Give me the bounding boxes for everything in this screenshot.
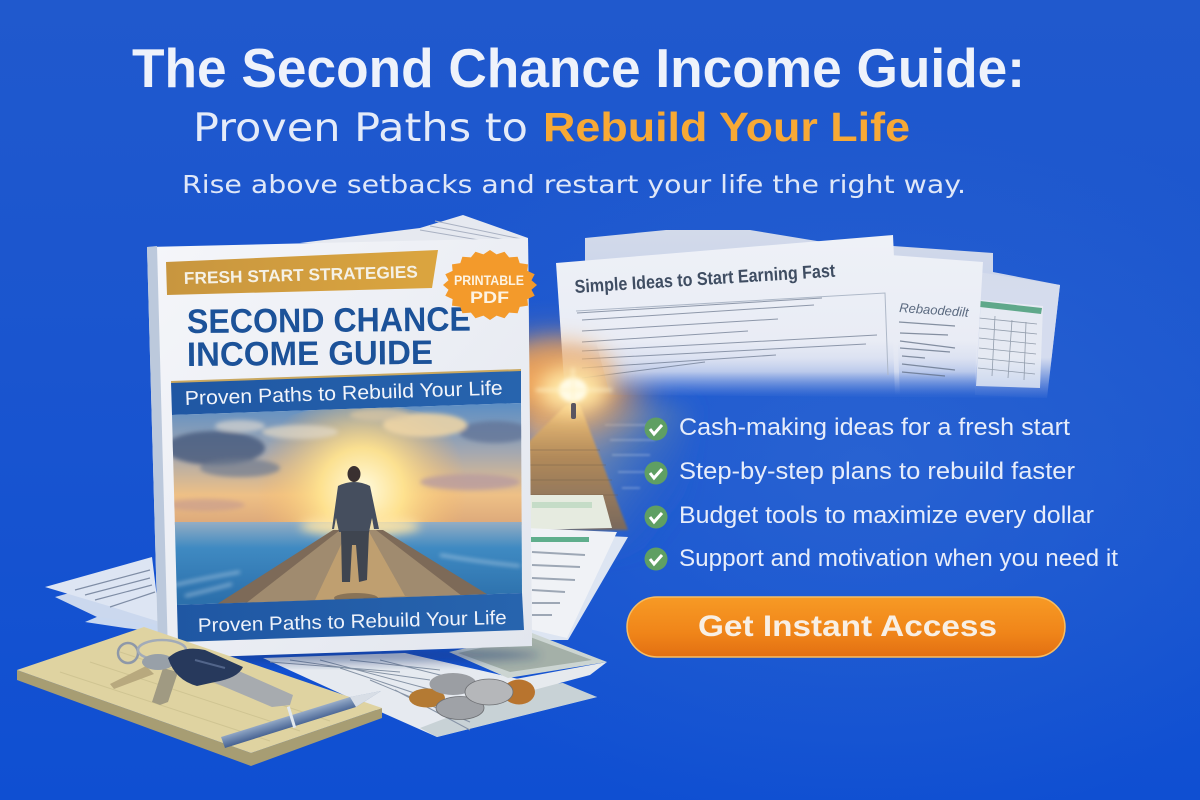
man bbox=[332, 466, 379, 603]
title: The Second Chance Income Guide: bbox=[132, 37, 1025, 99]
badge: printable pdf: PDF bbox=[470, 288, 509, 307]
call to action button: Get Instant Access bbox=[698, 610, 997, 643]
bottom band bbox=[177, 593, 524, 642]
tagline: Rise above setbacks and restart your life the right way. bbox=[182, 170, 966, 199]
book title: INCOME GUIDE bbox=[187, 334, 433, 374]
book title: SECOND CHANCE bbox=[187, 301, 471, 341]
sun glow bbox=[505, 340, 615, 419]
loose papers left bbox=[45, 557, 160, 632]
sheet: budget table bbox=[975, 272, 1060, 398]
worksheets bbox=[556, 230, 1060, 398]
subtitle: Proven Paths to bbox=[193, 106, 528, 151]
back sheets bbox=[585, 230, 1060, 398]
book title bbox=[187, 301, 471, 374]
cover bbox=[147, 238, 532, 658]
shadow bbox=[150, 647, 540, 663]
loose papers right bbox=[525, 495, 628, 640]
book subtitle band: Proven Paths to Rebuild Your Life bbox=[184, 377, 503, 410]
subtitle highlight: Rebuild Your Life bbox=[543, 104, 910, 150]
spine bbox=[147, 246, 168, 655]
keys bbox=[110, 640, 293, 707]
benefit 4: Support and motivation when you need it bbox=[679, 545, 1118, 572]
benefits list bbox=[644, 414, 1118, 572]
badge: printable pdf bbox=[443, 250, 537, 320]
page stack bbox=[300, 215, 532, 640]
banknotes and forms bbox=[263, 633, 607, 737]
benefit 1: Cash-making ideas for a fresh start bbox=[679, 414, 1070, 441]
sheet: rebuild: Rebaodedilt bbox=[899, 300, 970, 320]
benefit 3: Budget tools to maximize every dollar bbox=[679, 502, 1094, 529]
bottom band: Proven Paths to Rebuild Your Life bbox=[198, 607, 507, 637]
banner text: FRESH START STRATEGIES bbox=[184, 262, 418, 288]
book bbox=[147, 215, 540, 663]
pen bbox=[221, 691, 381, 748]
badge: printable pdf: PRINTABLE bbox=[454, 273, 524, 288]
benefit 2: Step-by-step plans to rebuild faster bbox=[679, 458, 1075, 485]
sheet: main bbox=[556, 235, 900, 395]
notepad bbox=[17, 627, 382, 766]
sheet: rebuild bbox=[890, 255, 983, 395]
sunset scene right of book bbox=[440, 343, 690, 560]
clouds bbox=[165, 409, 531, 511]
pier bbox=[214, 530, 490, 606]
sheet heading: Simple Ideas to Start Earning Fast bbox=[574, 260, 836, 297]
book subtitle band bbox=[171, 369, 521, 415]
cover photo bbox=[165, 400, 531, 607]
coins bbox=[409, 673, 535, 720]
call to action button bbox=[627, 597, 1065, 657]
banner bbox=[166, 250, 438, 295]
